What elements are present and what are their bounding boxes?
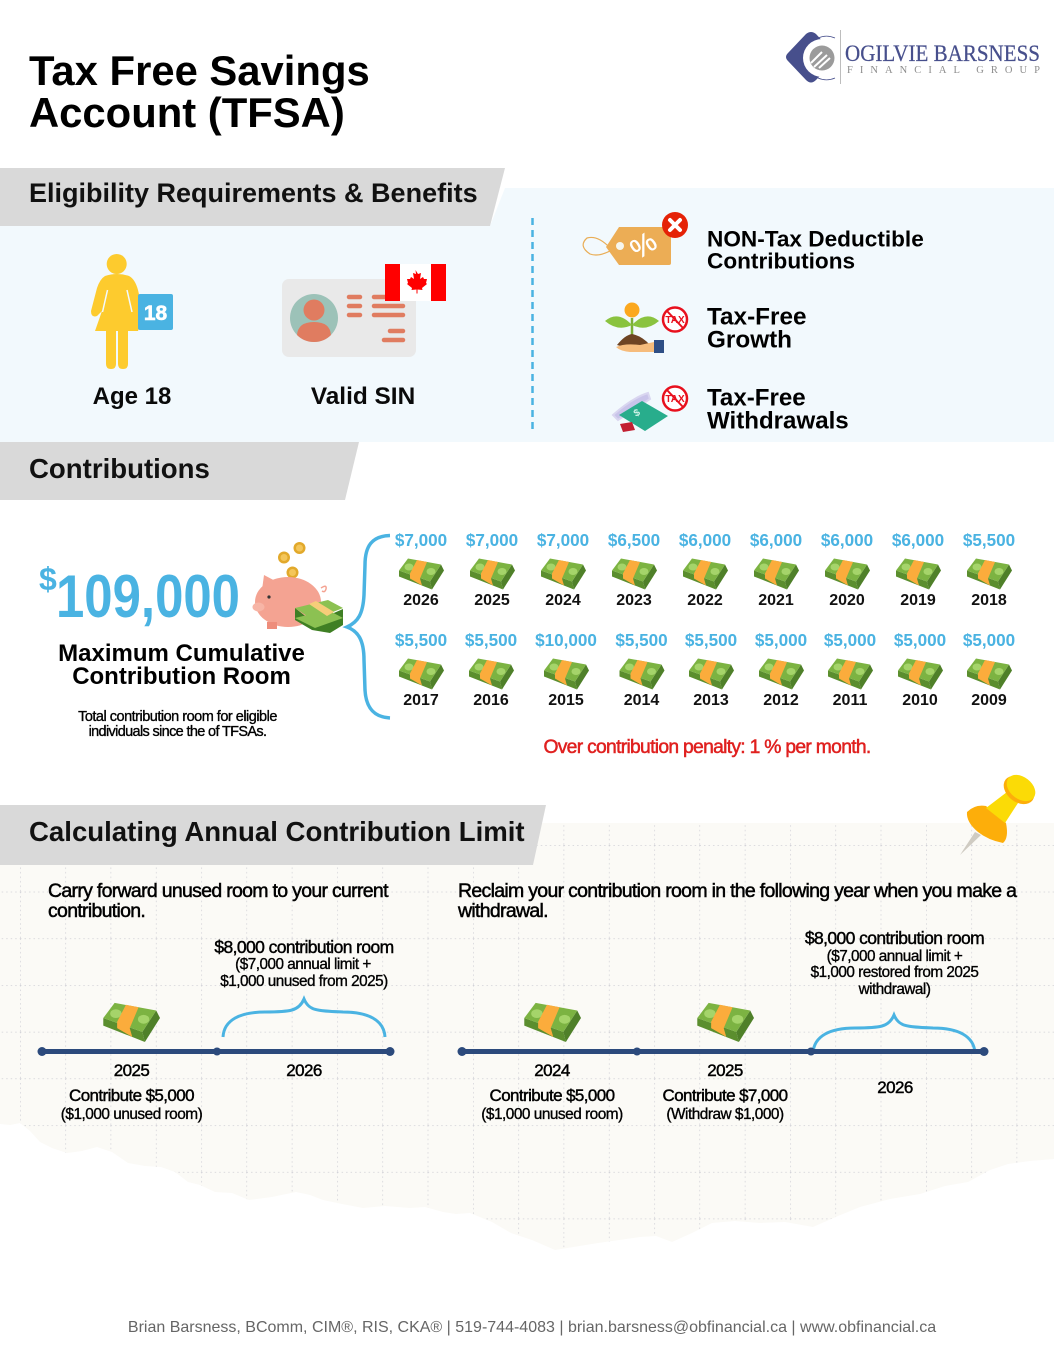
heading: eligibility: Eligibility Requirements & Benefits <box>29 178 478 208</box>
text: non-tax deductible: Contributions <box>707 248 855 274</box>
year item 2021: $6,000 <box>750 531 802 550</box>
text: carry forward: Carry forward unused room to your current <box>48 880 389 902</box>
text: maximum cumulative contribution room: Contribution Room <box>72 663 291 690</box>
year item 2025: 2025 <box>474 592 510 609</box>
year item 2018: $5,500 <box>963 531 1015 550</box>
year item 2010: $5,000 <box>894 631 946 650</box>
year item 2021: 2021 <box>758 592 794 609</box>
year item 2025: $7,000 <box>466 531 518 550</box>
brace: left 2026 <box>223 999 385 1037</box>
heading: calculating annual contribution limit: Calculating Annual Contribution Limit <box>29 816 525 847</box>
callout: left $8,000 room <box>214 937 394 990</box>
icon: push pin <box>960 769 1040 855</box>
year item 2014: 2014 <box>624 692 659 709</box>
icon: plant growth no tax <box>605 302 687 353</box>
text: maximum cumulative contribution room <box>58 640 305 690</box>
text: tax-free growth: Tax-Free <box>707 304 806 330</box>
text: tax-free withdrawals: Tax-Free <box>707 384 806 412</box>
heading: eligibility <box>0 168 505 226</box>
year item 2014: $5,500 <box>615 631 668 650</box>
year item 2026 <box>395 531 447 609</box>
note: total contribution room: individuals since the of TFSAs. <box>89 724 266 740</box>
heading: calculating annual contribution limit <box>0 805 546 865</box>
year item 2015 <box>535 631 597 709</box>
year item 2022 <box>679 531 731 609</box>
year item 2025 <box>466 531 518 609</box>
year item 2011: $5,000 <box>824 631 876 650</box>
title <box>29 47 370 136</box>
note: total contribution room <box>78 709 277 740</box>
year item 2009: $5,000 <box>963 631 1015 650</box>
big number: maximum room: 109,000 <box>56 563 240 630</box>
icon: cash 2025 right <box>697 1003 754 1042</box>
year item 2019: 2019 <box>900 592 936 609</box>
icon: cash 2024 <box>524 1003 581 1042</box>
year item 2023 <box>608 531 660 609</box>
text: tax-free growth <box>707 304 806 354</box>
year item 2024 <box>537 531 589 609</box>
text: non-tax deductible: NON-Tax Deductible <box>707 226 924 252</box>
label: 2026 left: 2026 <box>286 1061 322 1080</box>
icon: withdrawal no tax: $ <box>632 407 643 420</box>
dashed divider <box>531 218 534 433</box>
year item 2024: $7,000 <box>537 531 589 550</box>
callout: left $8,000 room: $1,000 unused from 2025) <box>220 973 388 990</box>
text: carry forward: contribution. <box>48 900 145 922</box>
year item 2013: 2013 <box>693 692 729 709</box>
year item 2020: 2020 <box>829 592 865 609</box>
brace: right 2026 <box>813 1015 975 1053</box>
text: tax-free withdrawals <box>707 384 849 434</box>
timeline: right <box>458 1047 988 1056</box>
year item 2011 <box>824 631 876 709</box>
year item 2023: 2023 <box>616 592 652 609</box>
year item 2012: $5,000 <box>755 631 807 650</box>
text: carry forward <box>48 880 389 922</box>
year item 2017: $5,500 <box>395 631 447 650</box>
text: reclaim: Reclaim your contribution room in the following year when you make a <box>458 880 1017 902</box>
text: reclaim: withdrawal. <box>457 900 548 922</box>
label: 2025 contribute: ($1,000 unused room) <box>61 1106 203 1123</box>
callout: over contribution penalty: Over contribution penalty: 1 % per month. <box>543 737 871 758</box>
title: Tax Free Savings <box>29 47 370 94</box>
year item 2022: 2022 <box>687 592 723 609</box>
label: valid SIN: Valid SIN <box>311 383 415 410</box>
timeline: left <box>38 1047 394 1056</box>
year item 2019 <box>892 531 944 609</box>
year item 2024: 2024 <box>545 592 581 609</box>
year item 2017 <box>395 631 447 709</box>
callout: right $8,000 room <box>805 928 984 998</box>
label: 2025 contribute withdraw: Contribute $7,000 <box>663 1086 788 1105</box>
title: Account (TFSA) <box>29 89 345 136</box>
label: 2025 contribute withdraw: 2025 <box>707 1061 743 1080</box>
callout: right $8,000 room: $8,000 contribution room <box>805 928 984 948</box>
year item 2012: 2012 <box>763 692 799 709</box>
callout: left $8,000 room: $8,000 contribution room <box>214 937 394 957</box>
year item 2013 <box>685 631 737 709</box>
heading: contributions <box>0 442 359 500</box>
panel: eligibility background <box>0 188 1054 442</box>
year item 2021 <box>750 531 802 609</box>
label: 2026 right: 2026 <box>877 1078 913 1097</box>
year item 2017: 2017 <box>403 692 439 709</box>
callout: left $8,000 room: ($7,000 annual limit + <box>235 956 371 973</box>
label: 2024 contribute <box>481 1061 623 1123</box>
year item 2010: 2010 <box>902 692 938 709</box>
year item 2022: $6,000 <box>679 531 731 550</box>
icon: woman age 18: 18 <box>144 302 167 325</box>
text: maximum cumulative contribution room: Maximum Cumulative <box>58 640 305 667</box>
panel: torn paper <box>0 823 1054 1253</box>
year item 2018: 2018 <box>971 592 1007 609</box>
label: 2024 contribute: ($1,000 unused room) <box>481 1106 623 1123</box>
note: total contribution room: Total contribution room for eligible <box>78 709 277 725</box>
year item 2020: $6,000 <box>821 531 873 550</box>
year item 2012 <box>755 631 807 709</box>
year item 2015: 2015 <box>548 692 584 709</box>
callout: right $8,000 room: withdrawal) <box>858 981 931 998</box>
year item 2016: 2016 <box>473 692 509 709</box>
callout: right $8,000 room: $1,000 restored from 2025 <box>811 964 978 981</box>
label: 2025 contribute: 2025 <box>114 1061 149 1080</box>
year item 2009: 2009 <box>971 692 1007 709</box>
year item 2018 <box>963 531 1015 609</box>
year item 2026: 2026 <box>403 592 439 609</box>
heading: contributions: Contributions <box>29 453 210 484</box>
label: 2024 contribute: 2024 <box>534 1061 570 1080</box>
label: 2025 contribute withdraw: (Withdraw $1,000) <box>666 1106 784 1123</box>
year item 2014 <box>615 631 668 709</box>
year item 2016: $5,500 <box>465 631 517 650</box>
icon: plant growth no tax: TAX <box>665 315 685 326</box>
icon: SIN card with Canadian flag <box>282 264 446 357</box>
footer: Brian Barsness, BComm, CIM®, RIS, CKA® | 519-744-4083 | brian.barsness@obfinancial.ca | www.obfinancial.ca <box>128 1319 936 1336</box>
text: tax-free withdrawals: Withdrawals <box>707 408 849 434</box>
text: reclaim <box>457 880 1017 922</box>
year item 2020 <box>821 531 873 609</box>
icon: tag with percent and X: % <box>624 225 662 265</box>
icon: piggy bank with coins and cash <box>252 542 343 633</box>
label: 2025 contribute withdraw <box>663 1061 788 1123</box>
logo: Ogilvie Barsness Financial Group <box>786 30 1040 84</box>
big number: maximum room: $ <box>39 561 57 597</box>
label: 2025 contribute: Contribute $5,000 <box>69 1086 194 1105</box>
year item 2016 <box>465 631 517 709</box>
year item 2009 <box>963 631 1015 709</box>
logo: Ogilvie Barsness Financial Group: FINANCIAL GROUP <box>847 65 1040 76</box>
label: 2025 contribute <box>61 1061 203 1123</box>
year item 2023: $6,500 <box>608 531 660 550</box>
brace: years <box>347 536 390 718</box>
icon: cash 2025 left <box>103 1003 160 1042</box>
callout: right $8,000 room: ($7,000 annual limit + <box>827 948 963 965</box>
year item 2019: $6,000 <box>892 531 944 550</box>
icon: tag with percent and X <box>583 212 688 265</box>
year item 2013: $5,500 <box>685 631 737 650</box>
text: non-tax deductible <box>707 226 924 274</box>
year item 2015: $10,000 <box>535 631 597 650</box>
label: 2024 contribute: Contribute $5,000 <box>490 1086 615 1105</box>
year item 2011: 2011 <box>833 692 867 709</box>
icon: woman age 18 <box>91 254 173 369</box>
text: tax-free growth: Growth <box>707 326 792 354</box>
year item 2026: $7,000 <box>395 531 447 550</box>
label: age 18: Age 18 <box>93 383 171 410</box>
year item 2010 <box>894 631 946 709</box>
icon: withdrawal no tax <box>613 386 687 432</box>
icon: withdrawal no tax: TAX <box>665 394 685 405</box>
